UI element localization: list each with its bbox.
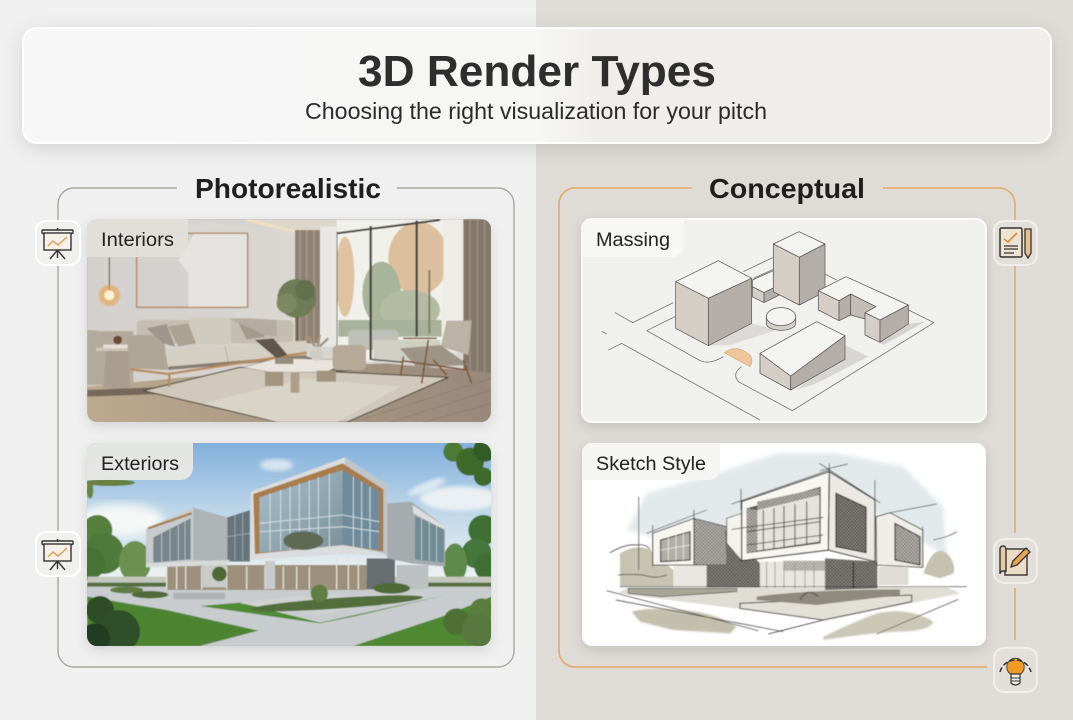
conceptual frame bbox=[559, 188, 1015, 667]
header panel bbox=[23, 28, 1051, 143]
label: Sketch Style bbox=[582, 443, 720, 480]
icon: presentation board (interiors) bbox=[36, 221, 80, 265]
panel: conceptual bbox=[559, 173, 1037, 692]
label: Exteriors: Exteriors bbox=[101, 454, 179, 475]
title: 3D Render Types bbox=[358, 47, 716, 96]
label: Massing: Massing bbox=[596, 230, 670, 251]
label: Sketch Style: Sketch Style bbox=[596, 454, 706, 475]
card: sketch style bbox=[582, 443, 986, 646]
background: left half bbox=[0, 0, 536, 720]
panel: photorealistic bbox=[36, 173, 514, 667]
card: exteriors bbox=[72, 438, 502, 653]
label: Exteriors bbox=[87, 443, 193, 480]
heading: Conceptual: Conceptual bbox=[709, 173, 865, 204]
background: right half bbox=[536, 0, 1073, 720]
card: interiors bbox=[87, 219, 491, 423]
icon: presentation board (exteriors) bbox=[36, 532, 80, 576]
heading: Photorealistic: Photorealistic bbox=[195, 173, 381, 204]
icon: light bulb bbox=[994, 648, 1037, 692]
label: Interiors: Interiors bbox=[101, 230, 174, 251]
subtitle: Choosing the right visualization for your pitch bbox=[305, 98, 767, 124]
label: Interiors bbox=[87, 219, 188, 257]
card: massing bbox=[582, 219, 986, 422]
icon: document with pencil bbox=[994, 221, 1037, 265]
icon: scroll with pencil bbox=[994, 539, 1037, 583]
photorealistic frame bbox=[58, 188, 514, 667]
